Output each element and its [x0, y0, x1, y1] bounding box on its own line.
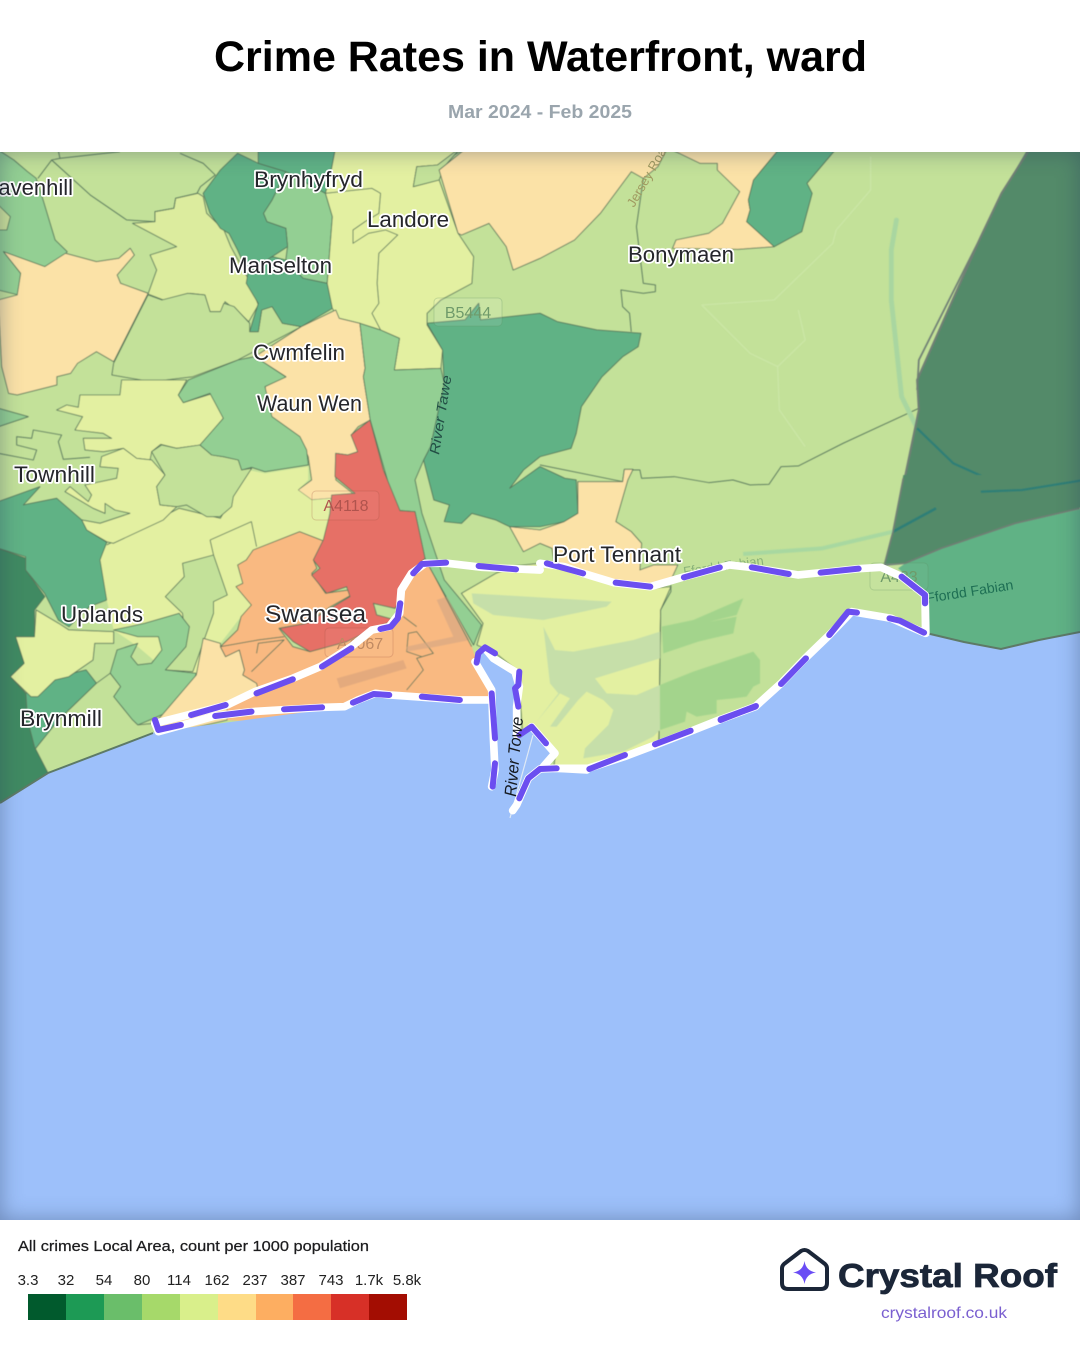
- dash: [284, 707, 322, 709]
- road label: Ffordd Fabian faint: Ffordd Fabian: [682, 553, 765, 579]
- districts: south-west quadrant: [0, 323, 492, 803]
- boundary: south green: [540, 408, 919, 485]
- road sign: B5444: [434, 298, 502, 326]
- area: Swansea peach west: [155, 638, 258, 737]
- area: lower Townhill pale: [65, 448, 177, 543]
- casing north west: [155, 563, 540, 723]
- place: Swansea: Swansea: [265, 601, 367, 628]
- dash: [890, 618, 924, 633]
- area: Ffordd Fabian teal: [898, 508, 1080, 653]
- legend values: [18, 1272, 422, 1289]
- districts: north-west quadrant: [0, 147, 668, 527]
- legend values: 114: [167, 1272, 191, 1289]
- dash: [902, 577, 925, 603]
- boundary: purple dashes west: [155, 563, 516, 730]
- dash: [616, 583, 650, 587]
- area: Manselton teal: [246, 257, 332, 332]
- legend values: 54: [96, 1272, 112, 1289]
- wordmark: Crystal Roof: [838, 1257, 1058, 1294]
- boundary: central pale edge: [106, 507, 223, 546]
- legend: [18, 1238, 422, 1320]
- casing river spit: [532, 727, 555, 767]
- area: Hafod river strip green: [360, 323, 481, 645]
- area: Bonymaen north peach: [672, 152, 777, 250]
- area: Cwmfelin green band: [112, 293, 301, 382]
- coast line east: [926, 632, 1080, 649]
- boundary: orange lobe: [251, 640, 284, 672]
- faint road: [702, 157, 871, 367]
- road: teal rail: [916, 428, 981, 476]
- place: Landore: Landore: [367, 207, 449, 232]
- place: Bonymaen: Bonymaen: [628, 242, 734, 267]
- boundary: north-west lines: [38, 153, 215, 222]
- districts: city centre: [280, 420, 472, 690]
- area: large teal: [424, 303, 641, 527]
- casing river mouth: [513, 768, 587, 811]
- faint road south: [778, 367, 805, 447]
- legend values: 80: [134, 1272, 150, 1289]
- legend values: 162: [204, 1272, 230, 1289]
- place: Brynhyfryd: Brynhyfryd: [254, 167, 363, 192]
- dash: [519, 727, 546, 743]
- dash loop: [477, 647, 495, 663]
- area: small cut-out: [0, 205, 10, 230]
- road sign: A483: [870, 563, 928, 590]
- boundary: marina plot: [407, 632, 433, 690]
- districts: Townhill detail: [0, 357, 308, 627]
- area: Uplands teal: [0, 487, 107, 627]
- area: top teal: [257, 152, 335, 194]
- docks: central basin: [537, 627, 660, 758]
- boundary: purple dashes east: [547, 563, 925, 719]
- river Tawe estuary: [477, 648, 555, 820]
- area: Swansea orange west: [220, 532, 387, 690]
- boundary: top line east: [60, 152, 120, 158]
- area: green strip: [165, 555, 227, 672]
- road sign: A4067: [325, 628, 393, 657]
- road sign: A483: A483: [880, 569, 918, 586]
- legend values: 237: [242, 1272, 268, 1289]
- subtitle: date range: Mar 2024 - Feb 2025: [448, 101, 632, 122]
- boundary: grey edge of dark land: [902, 150, 1029, 493]
- dash: [353, 694, 389, 703]
- stream: faint pale teal: [891, 220, 917, 428]
- dash: [684, 567, 720, 577]
- parcel: seafront buildings: [337, 660, 407, 688]
- boundary: Bonymaen inner: [621, 178, 655, 332]
- area: Waun Wen green: [178, 357, 308, 472]
- dash: [493, 763, 495, 787]
- road sign: A4118: A4118: [323, 498, 369, 515]
- area: north-east teal: [747, 147, 838, 247]
- boundary: dock line: [659, 585, 671, 742]
- area: Brynmill green: [34, 673, 158, 773]
- area: Kilvey dark strip: [902, 147, 1080, 493]
- area: round green lobe: [152, 445, 252, 517]
- road sign: A4118: [312, 491, 379, 520]
- dash corner: [155, 720, 181, 730]
- place: Uplands: Uplands: [61, 602, 143, 627]
- area: top peach: [439, 147, 668, 270]
- parcel: marina buildings: [407, 597, 470, 652]
- boundary: Landore inner: [325, 188, 398, 330]
- waterfront ward boundary: [155, 563, 926, 811]
- legend values: 743: [318, 1272, 344, 1289]
- area: red high crime: [280, 420, 425, 652]
- place: Townhill: Townhill: [14, 462, 95, 487]
- area: central waterfront orange: [227, 563, 492, 723]
- area: Brynhyfryd east: [263, 172, 332, 283]
- place: Cwmfelin: Cwmfelin: [253, 340, 345, 365]
- map edge vignette: [0, 152, 1080, 1220]
- boundary: purple dashes river: [477, 647, 756, 798]
- legend values: 1.7k: [355, 1272, 384, 1289]
- legend title: All crimes Local Area, count per 1000 population: [18, 1238, 369, 1255]
- dash: [721, 706, 756, 720]
- dash: [547, 563, 583, 573]
- boundary: top line: [52, 150, 60, 160]
- boundary: Swansea river edge: [425, 558, 472, 647]
- road label: Jersey Road: Jersey Road: [624, 139, 673, 210]
- area: small north green: [413, 152, 458, 184]
- boundary: rectangle parcel: [210, 522, 257, 547]
- dash: [191, 705, 226, 715]
- area: north pale: [133, 193, 258, 322]
- place: Waun Wen: Waun Wen: [257, 391, 362, 416]
- place labels: [0, 167, 734, 731]
- dash: [829, 612, 857, 635]
- dash: [479, 566, 516, 569]
- area: looped green: [110, 613, 196, 725]
- icon: house outline: [782, 1250, 827, 1289]
- dash: [655, 731, 691, 744]
- legend values: 32: [58, 1272, 74, 1289]
- dash: [821, 569, 859, 573]
- dash: [381, 603, 400, 629]
- casing north east and seaward: [540, 563, 926, 768]
- road sign: B5444: B5444: [445, 305, 491, 322]
- dash: [215, 712, 251, 716]
- land base: [0, 152, 1080, 765]
- dash: [519, 768, 557, 798]
- area: Port Tennant peach: [510, 469, 678, 588]
- rail: dashed teal: [893, 508, 936, 532]
- road label: Ffordd Fabian: Ffordd Fabian: [925, 576, 1014, 606]
- dash: [721, 707, 755, 719]
- logo: Crystal Roof: [782, 1250, 1058, 1322]
- area: Ravenhill: [0, 150, 67, 295]
- boundary: green strips near Townhill: [0, 430, 90, 460]
- dash: [422, 697, 460, 700]
- area: Townhill pale: [57, 380, 223, 460]
- place: Manselton: Manselton: [229, 253, 332, 278]
- place: Brynmill: Brynmill: [20, 706, 102, 731]
- thin river line: [510, 735, 533, 818]
- casing west shore: [155, 693, 489, 732]
- dash: [492, 693, 495, 738]
- area: west wedge: [0, 408, 28, 427]
- website: crystalroof.co.uk: [881, 1305, 1008, 1322]
- legend values: 3.3: [18, 1272, 38, 1289]
- area: Brynhyfryd teal: [203, 153, 288, 273]
- port road: pale teal: [743, 532, 893, 554]
- icon: star: [793, 1261, 816, 1284]
- dash: [515, 672, 519, 707]
- boundary: central plot: [403, 617, 417, 627]
- road sign: A4067: A4067: [337, 636, 383, 653]
- coast line: [0, 733, 153, 803]
- legend colour scale: [28, 1294, 407, 1320]
- boundary: grey double line: [916, 242, 977, 390]
- area: Landore pale: [325, 147, 474, 370]
- boundary: rectangle parcel side: [210, 540, 214, 555]
- area: central pale: [100, 467, 331, 675]
- place: Port Tennant: Port Tennant: [553, 542, 681, 567]
- boundary: small plot: [220, 637, 284, 647]
- dash: [257, 679, 293, 693]
- boundary: grey edge south dark land: [884, 478, 1080, 565]
- dash: [752, 567, 789, 574]
- dash: [781, 658, 806, 684]
- docks: east lower: [660, 652, 760, 730]
- casing river west bank: [475, 662, 495, 787]
- legend values: 387: [280, 1272, 306, 1289]
- rail: teal line east: [981, 480, 1080, 492]
- districts: south-east quadrant: [461, 469, 1080, 768]
- area: lower teal: [17, 670, 96, 750]
- area: Uplands pale: [10, 610, 114, 697]
- casing river east bank: [485, 648, 519, 735]
- dash: [589, 755, 625, 769]
- area: west dark edge: [0, 548, 48, 803]
- area: west peach: [0, 248, 148, 395]
- dash: [413, 563, 446, 573]
- river label upper: River Tawe: [426, 374, 455, 455]
- districts: north-east quadrant: [540, 147, 1080, 493]
- area: dark east land: [884, 475, 1080, 565]
- boundary: white casing: [155, 563, 926, 811]
- legend values: 5.8k: [393, 1272, 422, 1289]
- title: Crime Rates in Waterfront, ward: [214, 33, 867, 81]
- docks: east upper: [662, 598, 743, 653]
- area: dock pale: [461, 563, 671, 768]
- sea: [0, 612, 1080, 1220]
- river label lower: River Towe: [501, 716, 527, 797]
- dash: [322, 648, 351, 667]
- area: Waun Wen peach: [255, 310, 370, 500]
- docks detail: [472, 593, 760, 758]
- docks: north strip: [472, 593, 612, 620]
- choropleth areas: [0, 147, 1080, 803]
